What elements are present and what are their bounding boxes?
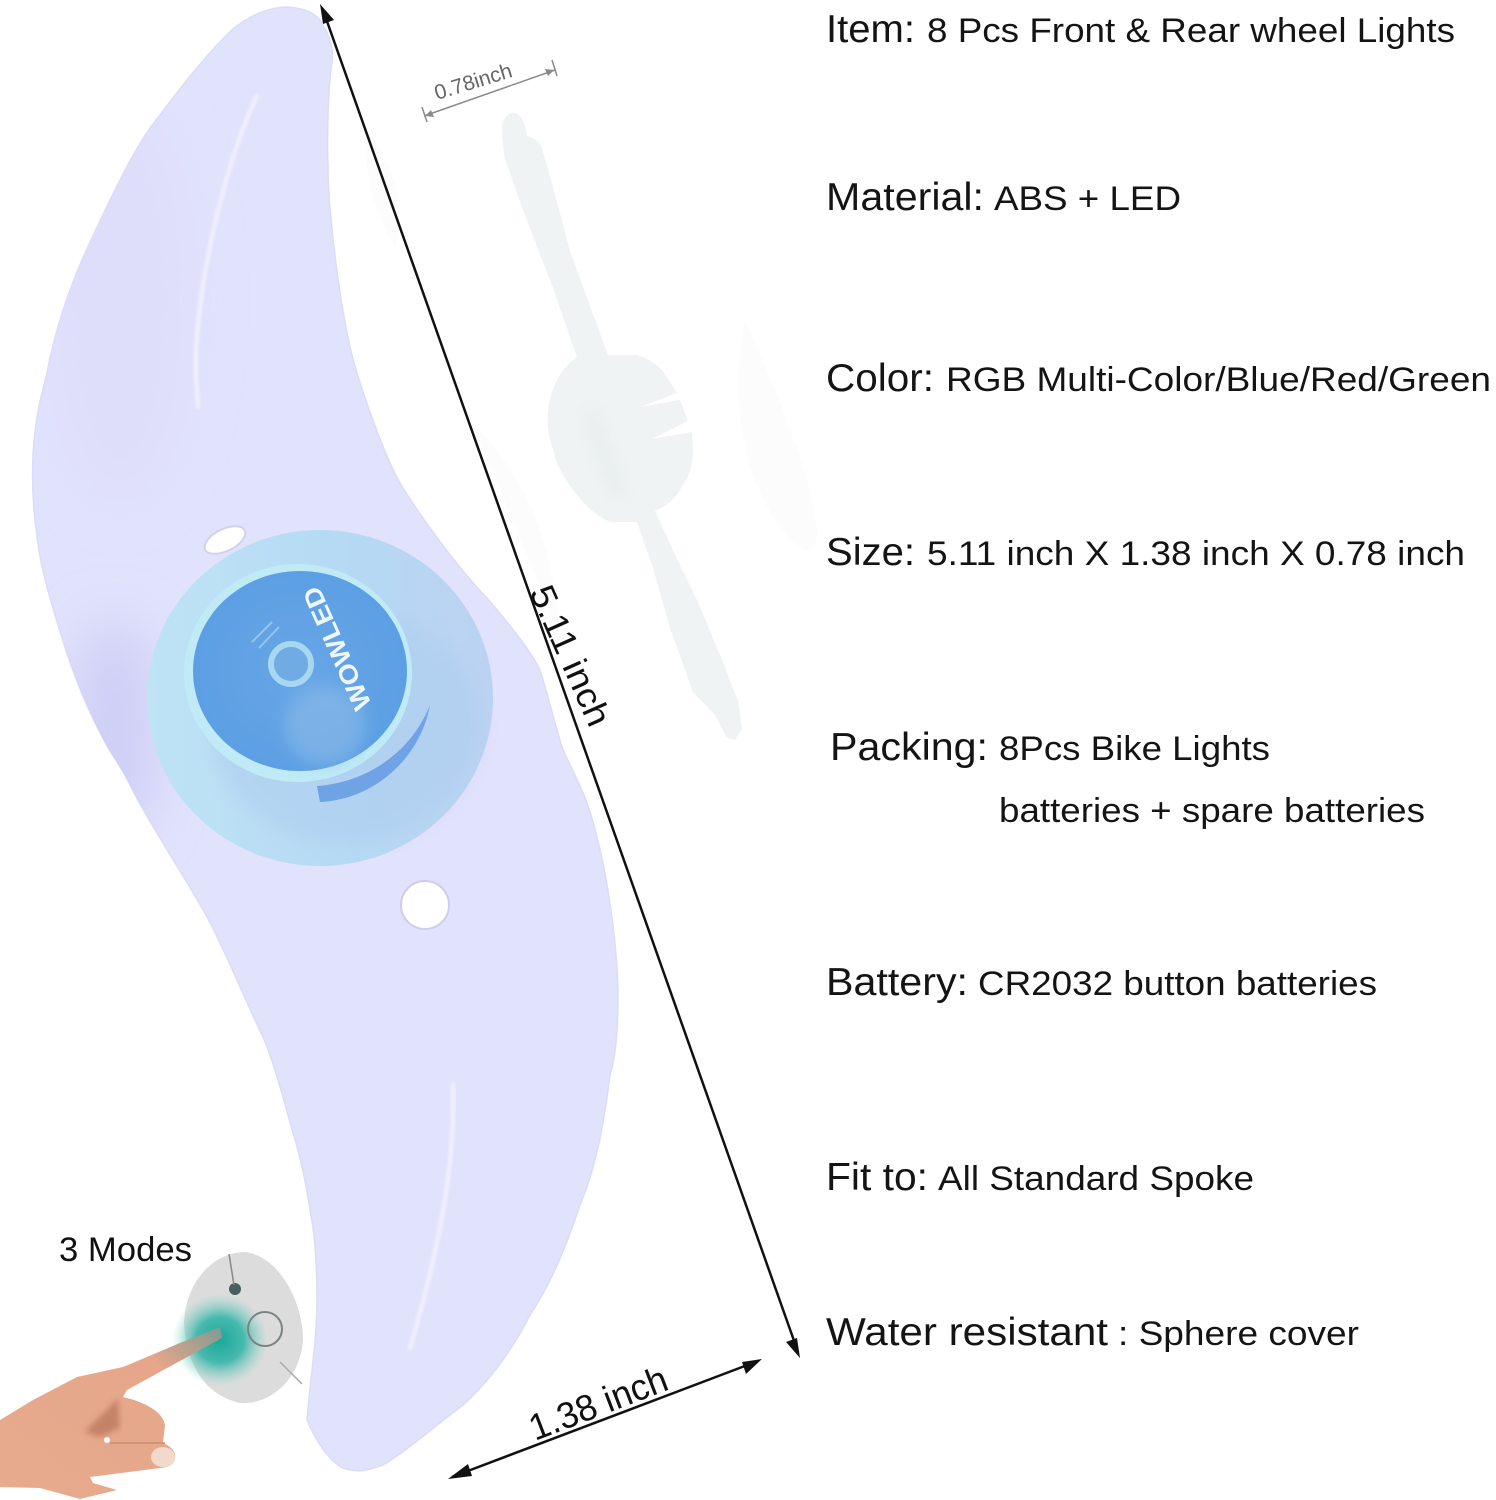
length arrow 5.11 inch: 5.11 inch <box>522 579 618 732</box>
spec: item: Item: <box>826 8 915 51</box>
spec: size: Size: <box>826 531 915 574</box>
mount hole upper <box>200 520 250 560</box>
spec: fit: All Standard Spoke <box>938 1160 1254 1198</box>
blade highlights <box>196 96 453 1348</box>
spec: fit: Fit to: <box>826 1156 928 1199</box>
length arrow 5.11 inch <box>320 4 800 1358</box>
spec: packing: batteries + spare batteries <box>999 792 1425 830</box>
LED housing <box>147 530 493 866</box>
width arrow 1.38 inch <box>448 1358 762 1479</box>
spec: size: 5.11 inch X 1.38 inch X 0.78 inch <box>927 535 1465 573</box>
spec: item: 8 Pcs Front & Rear wheel Lights <box>927 12 1455 50</box>
spec: battery: Battery: <box>826 961 968 1004</box>
spec: water: : Sphere cover <box>1118 1315 1359 1353</box>
pointing hand <box>0 1327 222 1499</box>
width dimension 0.78 inch <box>422 59 557 122</box>
spec: packing: 8Pcs Bike Lights <box>999 730 1270 768</box>
width dimension 0.78 inch: 0.78inch <box>432 59 515 105</box>
spec: material: ABS + LED <box>994 180 1181 218</box>
spec: water: Water resistant <box>826 1311 1108 1354</box>
mount hole lower <box>401 881 449 929</box>
LED ring <box>271 644 311 684</box>
specification list <box>826 8 1491 1354</box>
round light button <box>172 1252 303 1403</box>
3 modes inset <box>0 1231 303 1499</box>
spec: material: Material: <box>826 176 984 219</box>
spec: battery: CR2032 button batteries <box>978 965 1377 1003</box>
spec: color: RGB Multi-Color/Blue/Red/Green <box>946 361 1491 399</box>
width arrow 1.38 inch: 1.38 inch <box>523 1358 673 1448</box>
faint ghost reflections <box>366 130 817 640</box>
LED face <box>184 564 412 782</box>
spec: packing: Packing: <box>830 726 988 769</box>
spoke mount product <box>502 113 742 740</box>
spec: color: Color: <box>826 357 934 400</box>
3 modes label: 3 Modes <box>59 1231 192 1269</box>
WOWLED brand: WOWLED <box>296 582 377 715</box>
light blade product <box>33 7 618 1471</box>
